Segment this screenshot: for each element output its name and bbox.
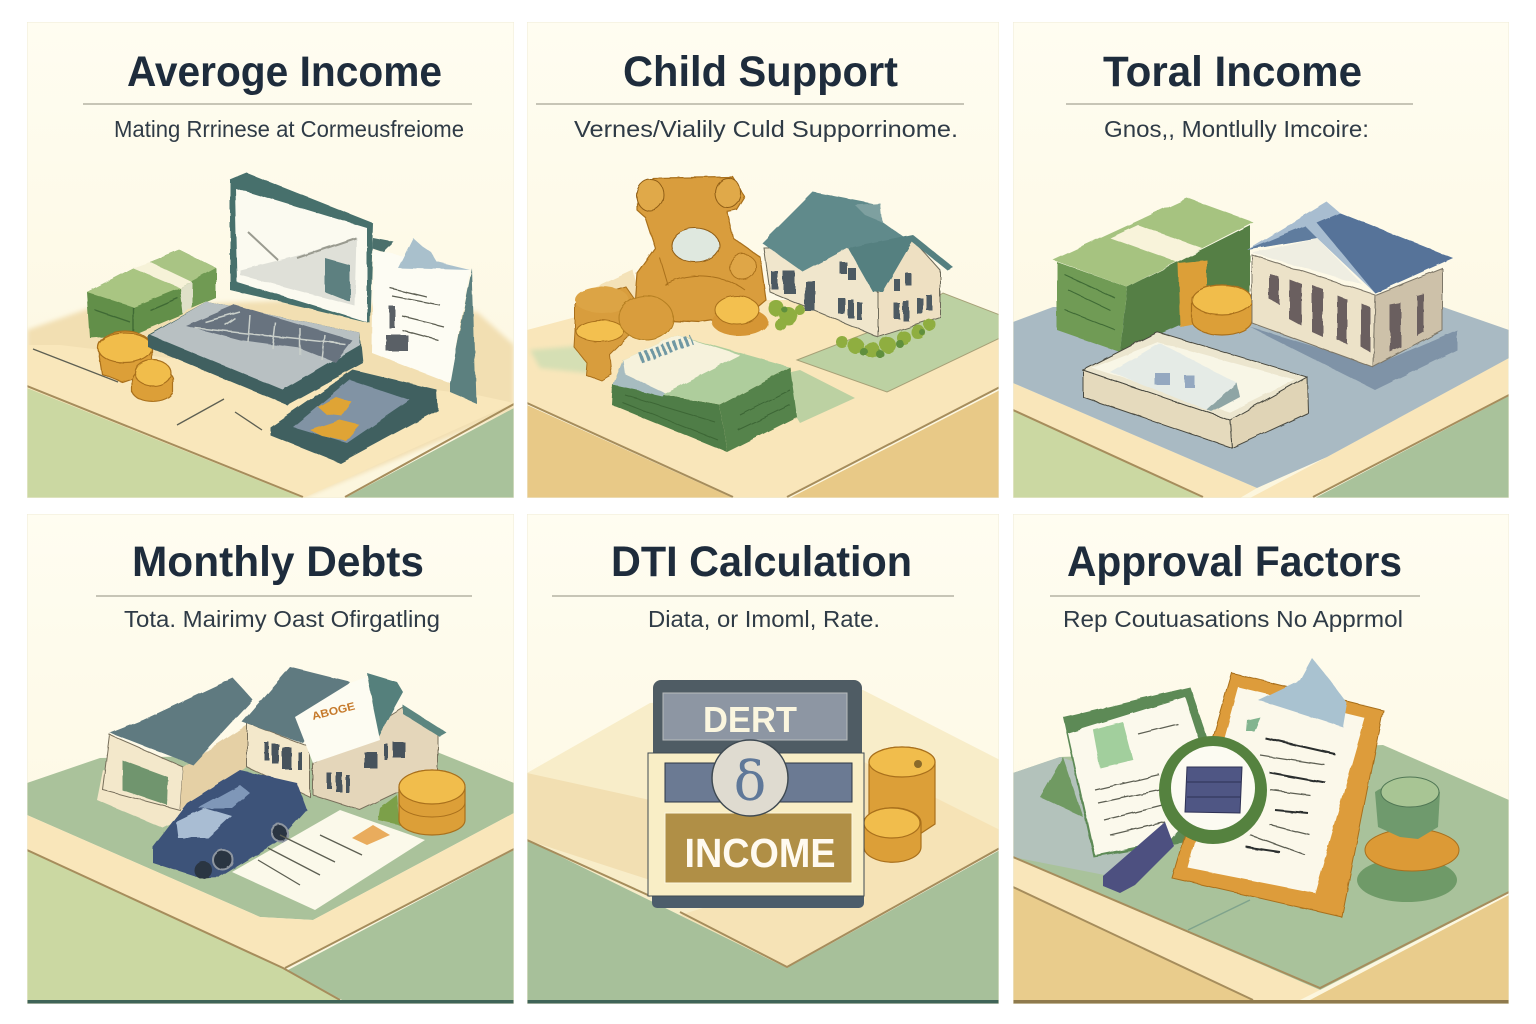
- icon: debt paper: [232, 810, 425, 910]
- icon: stack of cash with paper: [612, 335, 797, 452]
- icon: teddy bear: [574, 177, 768, 381]
- heading: Average Income: Averoge Income: [127, 48, 442, 96]
- icon: houses: [97, 667, 447, 828]
- panel: Average Income: [27, 22, 514, 498]
- icon: bank building: [1247, 202, 1457, 390]
- ground: tan tabletop: [27, 300, 514, 498]
- icon: approval stamp: [1357, 777, 1459, 902]
- subtitle: DTI Calculation: Diata, or Imoml, Rate.: [648, 606, 880, 632]
- icon: tablet: [270, 370, 438, 463]
- ground: beige diamond: [527, 690, 1000, 1004]
- panel: Total Income: [1013, 22, 1509, 498]
- icon: coins: [98, 331, 173, 401]
- icon: tray with papers: [1083, 332, 1308, 448]
- ground: lawn: [530, 293, 1000, 423]
- panel: Approval Factors: [1013, 514, 1509, 1004]
- icon: coin stack: [864, 747, 935, 862]
- heading: Monthly Debts: Monthly Debts: [132, 538, 424, 586]
- icon: coin stack: [1192, 285, 1252, 335]
- subtitle: Average Income: Mating Rrrinese at Cormeusfreiome: [114, 116, 464, 142]
- subtitle: Child Support: Vernes/Vialily Culd Supporrinome.: [574, 116, 958, 142]
- icon: clipboard: [1172, 658, 1383, 917]
- label: debt: DERT: [703, 699, 797, 740]
- subtitle: Approval Factors: Rep Coutuasations No Apprmol: [1063, 606, 1403, 632]
- subtitle: Total Income: Gnos,, Montlully Imcoire:: [1104, 116, 1369, 142]
- icon: blue car: [153, 770, 307, 879]
- ground: desk: [1013, 745, 1509, 1004]
- ground: lawn and road: [27, 752, 514, 1004]
- panel: Monthly Debts: [27, 514, 514, 1004]
- icon: stack of cash: [87, 250, 216, 338]
- icon: DTI calculator card: [648, 680, 864, 908]
- icon: document with clip: [372, 238, 476, 403]
- subtitle: Monthly Debts: Tota. Mairimy Oast Ofirgatling: [124, 606, 440, 632]
- ground: blue lot and road: [1013, 307, 1509, 498]
- label: divide glyph: δ: [734, 750, 766, 813]
- icon: white card: ABOGE: [311, 701, 356, 723]
- label: income: INCOME: [684, 830, 836, 876]
- heading: Total Income: Toral Income: [1103, 48, 1362, 96]
- ground: tan lot: [527, 300, 1000, 498]
- panel: Child Support: [527, 22, 1000, 498]
- icon: coin stack: [399, 770, 465, 835]
- icon: white card: [295, 677, 380, 763]
- heading: DTI Calculation: DTI Calculation: [611, 538, 912, 586]
- icon: report book: [1040, 687, 1215, 857]
- icon: magnifying glass: [1103, 736, 1267, 893]
- icon: laptop: [148, 173, 394, 405]
- icon: stack of cash: [1053, 198, 1253, 352]
- heading: Child Support: Child Support: [623, 48, 898, 96]
- icon: house: [762, 192, 953, 358]
- heading: Approval Factors: Approval Factors: [1067, 538, 1402, 586]
- panel: DTI Calculation: [527, 514, 1000, 1004]
